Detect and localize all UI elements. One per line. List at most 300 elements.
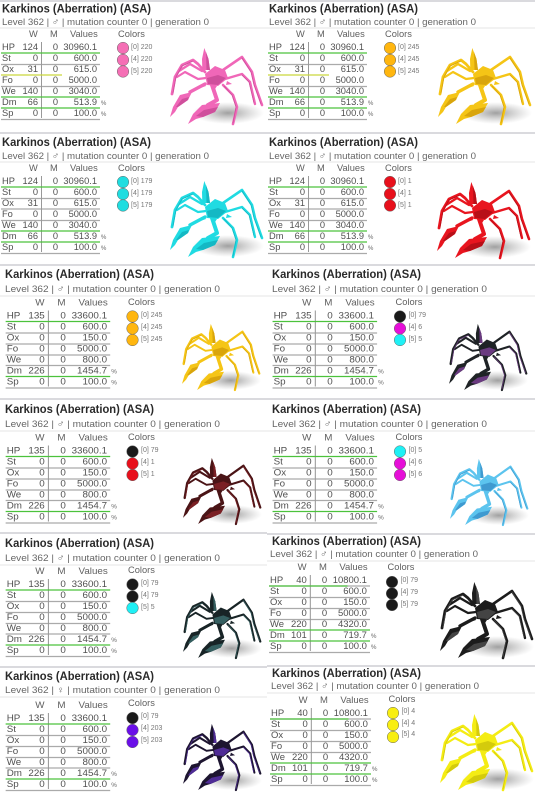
stats table: 0 [320, 53, 325, 63]
stats table: 0 [60, 601, 66, 612]
panel: sky blue karkinos [267, 399, 535, 525]
stats table: 0 [320, 64, 325, 74]
stats table [6, 700, 117, 790]
stats table: Ox [271, 729, 283, 740]
stats table: We [7, 757, 21, 768]
stats table: Dm [269, 231, 284, 241]
stats table: 0 [327, 479, 333, 489]
stats table: 140 [22, 86, 38, 96]
stats table: Fo [271, 740, 282, 751]
stats table: We [7, 355, 21, 365]
stats table: 0 [53, 42, 58, 52]
stats table: M [320, 694, 328, 705]
stats table: 31 [295, 198, 305, 208]
stats table: 100.0 [343, 640, 367, 651]
stats table: M [50, 163, 58, 173]
stats table: 10800.1 [334, 707, 368, 718]
subtitle: Level 362 | ♂ | mutation counter 0 | generation 0 [5, 284, 220, 295]
stats table: 0 [322, 640, 327, 651]
stats table: 0 [60, 311, 66, 321]
stats table: Sp [270, 640, 282, 651]
stats table: 0 [300, 53, 305, 63]
stats table: 33600.1 [72, 446, 107, 456]
stats table: W [35, 700, 44, 711]
stats table: 0 [322, 585, 327, 596]
color swatches: [0] 79 [141, 713, 159, 720]
stats table: 0 [53, 187, 58, 197]
stats table: 0 [53, 176, 58, 186]
stats table: Fo [7, 746, 18, 757]
stats table: 0 [327, 355, 333, 365]
icon: dark purple crab [183, 724, 262, 790]
stats table: 0 [301, 596, 307, 607]
stats table: St [7, 457, 16, 467]
stats table: 0 [60, 366, 66, 376]
stats table: 150.0 [82, 468, 107, 478]
stats table: 0 [322, 618, 327, 629]
stats table: 1454.7 [77, 366, 107, 376]
stats table: % [111, 771, 117, 778]
stats table: 0 [60, 501, 66, 511]
stats table: M [57, 700, 66, 711]
stats table: 0 [302, 718, 308, 729]
stats table: Sp [269, 108, 280, 118]
stats table: 600.0 [349, 322, 374, 332]
stats table: 1454.7 [77, 634, 107, 645]
stats table: 719.7 [343, 629, 367, 640]
stats table: 0 [323, 718, 328, 729]
stats table: Values [79, 566, 108, 577]
stats table: 135 [28, 579, 45, 590]
stats table: HP [7, 579, 20, 590]
color swatches: [5] 245 [398, 68, 420, 75]
color swatches: [5] 1 [141, 471, 155, 478]
stats table: 0 [53, 209, 58, 219]
stats table: 0 [327, 446, 333, 456]
stats table: 5000.0 [344, 344, 374, 354]
stats table: % [368, 112, 374, 118]
stats table: 0 [323, 740, 328, 751]
stats table: 31 [28, 198, 38, 208]
subtitle: Level 362 | ♂ | mutation counter 0 | generation 0 [271, 681, 479, 692]
stats table: St [274, 457, 283, 467]
stats table: 0 [302, 773, 308, 784]
stats table: W [299, 694, 308, 705]
color swatches: Colors [385, 29, 412, 39]
stats table: % [111, 782, 117, 789]
color swatches: [0] 5 [408, 447, 422, 454]
stats table: 30960.1 [63, 176, 97, 186]
stats table: 600.0 [82, 724, 107, 735]
stats table: 0 [306, 355, 312, 365]
stats table: Dm [7, 768, 22, 779]
stats table: 0 [53, 64, 58, 74]
stats table: 150.0 [82, 601, 107, 612]
stats table: 0 [60, 333, 66, 343]
title: Karkinos (Aberration) (ASA) [269, 2, 418, 16]
stats table: 1454.7 [344, 501, 374, 511]
stats table: Values [337, 163, 365, 173]
stats table: Fo [269, 75, 280, 85]
stats table: 150.0 [343, 596, 367, 607]
stats table: 150.0 [82, 333, 107, 343]
stats table: 220 [292, 751, 308, 762]
stats table: 0 [306, 377, 312, 387]
stats table: 100.0 [82, 512, 107, 522]
stats table: 0 [60, 623, 66, 634]
color swatches: [4] 6 [408, 459, 422, 466]
stats table: We [7, 623, 21, 634]
stats table: 33600.1 [72, 311, 107, 321]
stats table: 0 [320, 198, 325, 208]
color swatches: [5] 6 [408, 471, 422, 478]
stats table: 124 [289, 42, 305, 52]
stats table [6, 433, 117, 523]
stats table: 0 [306, 322, 312, 332]
stats table: 66 [295, 97, 305, 107]
stats table: Fo [7, 612, 18, 623]
stats table: 0 [60, 634, 66, 645]
title: Karkinos (Aberration) (ASA) [2, 2, 151, 16]
stats table: W [302, 298, 311, 308]
stats table: 0 [301, 640, 307, 651]
stats table: 135 [295, 311, 312, 321]
stats table: 124 [22, 176, 38, 186]
stats table: 0 [60, 779, 66, 790]
stats table: Fo [2, 75, 13, 85]
stats table: Values [70, 29, 98, 39]
stats table: 3040.0 [69, 86, 97, 96]
subtitle: Level 362 | ♂ | mutation counter 0 | generation 0 [2, 17, 209, 28]
stats table: % [111, 637, 117, 644]
stats table [273, 298, 384, 388]
stats table: 600.0 [349, 457, 374, 467]
color swatches: Colors [385, 163, 412, 173]
icon: dark teal crab [183, 592, 262, 658]
stats table: % [101, 235, 107, 241]
stats table: 226 [28, 366, 45, 376]
stats table: % [378, 380, 384, 386]
stats table: 0 [306, 468, 312, 478]
stats table: Fo [7, 479, 18, 489]
stats table: % [372, 778, 378, 784]
stats table: 615.0 [74, 64, 97, 74]
stats table: 0 [322, 574, 327, 585]
stats table: M [317, 163, 325, 173]
color swatches: [0] 79 [400, 577, 418, 584]
icon: pink crab [170, 48, 264, 124]
stats table: 0 [60, 479, 66, 489]
icon: gold crab [182, 324, 261, 390]
stats table: Ox [269, 198, 281, 208]
stats table: 0 [53, 97, 58, 107]
color swatches: [5] 79 [400, 601, 418, 608]
color swatches: [0] 179 [131, 178, 153, 185]
title: Karkinos (Aberration) (ASA) [272, 666, 421, 680]
stats table: % [111, 648, 117, 655]
stats table: St [7, 590, 16, 601]
stats table: 0 [60, 355, 66, 365]
stats table: 0 [320, 42, 325, 52]
subtitle: Level 362 | ♂ | mutation counter 0 | generation 0 [269, 151, 476, 162]
stats table: 124 [289, 176, 305, 186]
stats table: 1454.7 [344, 366, 374, 376]
stats table: St [7, 724, 16, 735]
stats table: Dm [7, 634, 22, 645]
color swatches: [0] 79 [141, 580, 159, 587]
stats table: Fo [7, 344, 18, 354]
stats table [6, 566, 117, 656]
color swatches: [4] 1 [141, 459, 155, 466]
stats table: 0 [320, 242, 325, 252]
color swatches [127, 297, 163, 346]
stats table: 800.0 [82, 623, 107, 634]
stats table: 33600.1 [72, 713, 107, 724]
stats table: M [57, 298, 66, 308]
stats table: St [270, 585, 279, 596]
color swatches [127, 432, 159, 481]
stats table: HP [2, 42, 15, 52]
icon: dark red crab [183, 458, 262, 524]
stats table: 0 [33, 242, 38, 252]
stats table: 0 [320, 97, 325, 107]
stats table: 600.0 [343, 585, 367, 596]
title: Karkinos (Aberration) (ASA) [272, 534, 421, 548]
stats table: 5000.0 [77, 479, 107, 489]
stats table: % [368, 235, 374, 241]
panel: cyan karkinos [0, 133, 267, 257]
stats table: Ox [274, 468, 286, 478]
stats table: 0 [60, 446, 66, 456]
title: Karkinos (Aberration) (ASA) [2, 135, 151, 149]
stats table: Sp [274, 377, 286, 387]
stats table: 40 [296, 574, 307, 585]
stats table [268, 163, 374, 254]
stats table: Dm [270, 629, 285, 640]
stats table: W [296, 29, 305, 39]
stats table: 0 [39, 333, 45, 343]
subtitle: Level 362 | ♂ | mutation counter 0 | generation 0 [2, 151, 209, 162]
stats table: Sp [271, 773, 283, 784]
stats table: Values [79, 433, 108, 443]
stats table: Ox [7, 333, 19, 343]
stats table: 0 [53, 220, 58, 230]
stats table: M [324, 433, 333, 443]
stats table: Ox [274, 333, 286, 343]
stats table: 0 [39, 645, 45, 656]
stats table: 0 [306, 333, 312, 343]
stats table: 600.0 [341, 187, 364, 197]
stats table: 615.0 [74, 198, 97, 208]
color swatches [384, 163, 412, 211]
color swatches: [4] 220 [131, 56, 153, 63]
stats table: 0 [327, 501, 333, 511]
stats table: 150.0 [349, 333, 374, 343]
color swatches [387, 694, 416, 743]
stats table: % [371, 645, 377, 651]
stats table: Ox [7, 735, 19, 746]
stats table: 226 [28, 501, 45, 511]
stats table: Values [345, 298, 375, 308]
stats table: Sp [7, 512, 19, 522]
stats table: Ox [7, 601, 19, 612]
stats table: % [101, 101, 107, 107]
stats table: 0 [39, 590, 45, 601]
stats table: % [111, 504, 117, 510]
stats table: 100.0 [82, 779, 107, 790]
stats table: 0 [323, 773, 328, 784]
stats table: We [2, 86, 16, 96]
stats table: Sp [2, 242, 13, 252]
color swatches: Colors [128, 698, 155, 708]
icon: dark magenta crab [449, 324, 528, 390]
stats table: 226 [28, 634, 45, 645]
stats table: 226 [28, 768, 45, 779]
color swatches [117, 163, 153, 211]
panel: gold karkinos level 135 HP [0, 265, 267, 390]
stats table: % [368, 101, 374, 107]
stats table: % [378, 515, 384, 521]
stats table: St [269, 187, 278, 197]
stats table: 3040.0 [336, 220, 364, 230]
stats table: 0 [39, 735, 45, 746]
stats table: 0 [39, 457, 45, 467]
stats table: 0 [300, 108, 305, 118]
icon: red crab [437, 182, 531, 258]
stats table: 0 [323, 729, 328, 740]
stats table: 800.0 [82, 490, 107, 500]
stats table: 0 [306, 490, 312, 500]
color swatches: [0] 79 [141, 447, 159, 454]
subtitle: Level 362 | ♀ | mutation counter 0 | generation 0 [5, 685, 220, 696]
stats table: We [270, 618, 284, 629]
stats table: We [7, 490, 21, 500]
stats table: 0 [327, 344, 333, 354]
stats table: W [298, 561, 307, 572]
stats table: 1454.7 [77, 768, 107, 779]
title: Karkinos (Aberration) (ASA) [272, 402, 421, 416]
stats table: 0 [60, 645, 66, 656]
stats table: 140 [22, 220, 38, 230]
stats table: 100.0 [341, 108, 364, 118]
stats table: 5000.0 [336, 209, 364, 219]
stats table: 0 [39, 322, 45, 332]
stats table: 0 [60, 735, 66, 746]
icon: yellow crab [440, 714, 534, 790]
stats table: Dm [274, 501, 289, 511]
stats table: 0 [60, 612, 66, 623]
stats table: HP [271, 707, 284, 718]
color swatches: Colors [118, 163, 145, 173]
color swatches: [5] 4 [402, 731, 415, 738]
stats table [270, 694, 378, 786]
stats table: M [319, 561, 327, 572]
stats table: 800.0 [82, 757, 107, 768]
stats table: Values [70, 163, 98, 173]
stats table: 0 [327, 468, 333, 478]
stats table: 0 [39, 490, 45, 500]
stats table: 0 [60, 322, 66, 332]
stats table: 0 [306, 479, 312, 489]
stats table: W [302, 433, 311, 443]
color swatches: [4] 4 [402, 720, 415, 727]
title: Karkinos (Aberration) (ASA) [5, 267, 154, 281]
color swatches: [5] 5 [408, 336, 422, 343]
stats table: 100.0 [349, 512, 374, 522]
stats table: 100.0 [82, 377, 107, 387]
color swatches: [5] 5 [141, 604, 155, 611]
stats table: 0 [60, 590, 66, 601]
stats table: 0 [33, 53, 38, 63]
color swatches: [4] 79 [141, 592, 159, 599]
stats table: 0 [60, 579, 66, 590]
color swatches: [4] 245 [141, 324, 163, 331]
stats table: Values [79, 298, 108, 308]
stats table: St [2, 53, 11, 63]
stats table: Dm [274, 366, 289, 376]
stats table: Sp [7, 779, 19, 790]
color swatches: Colors [388, 562, 415, 572]
stats table: 0 [39, 612, 45, 623]
stats table: 40 [297, 707, 308, 718]
stats table: 0 [320, 209, 325, 219]
color swatches [384, 29, 420, 77]
stats table: % [101, 112, 107, 118]
color swatches: Colors [128, 565, 155, 575]
stats table: St [274, 322, 283, 332]
stats table: 30960.1 [63, 42, 97, 52]
stats table: 0 [53, 86, 58, 96]
stats table: Sp [7, 645, 19, 656]
stats table: 513.9 [74, 97, 97, 107]
stats table: Values [337, 29, 365, 39]
stats table: 30960.1 [330, 42, 364, 52]
stats table: St [2, 187, 11, 197]
stats table: Fo [270, 607, 281, 618]
stats table: 220 [291, 618, 307, 629]
color swatches: Colors [388, 694, 416, 704]
stats table: 0 [60, 512, 66, 522]
title: Karkinos (Aberration) (ASA) [5, 402, 154, 416]
stats table: 0 [53, 231, 58, 241]
stats table: 0 [323, 762, 328, 773]
stats table [273, 433, 384, 523]
stats table: 0 [39, 355, 45, 365]
stats table: 3040.0 [336, 86, 364, 96]
stats table: Dm [7, 366, 22, 376]
stats table: 33600.1 [338, 446, 374, 456]
stats table: 513.9 [341, 231, 364, 241]
stats table: 31 [295, 64, 305, 74]
stats table: 0 [327, 512, 333, 522]
stats table: 615.0 [341, 198, 364, 208]
stats table: % [368, 246, 374, 252]
color swatches: [5] 203 [141, 737, 163, 744]
stats table: 31 [28, 64, 38, 74]
color swatches: [4] 79 [400, 589, 418, 596]
subtitle: Level 362 | ♂ | mutation counter 0 | generation 0 [270, 549, 478, 560]
stats table: 719.7 [344, 762, 368, 773]
stats table: HP [274, 446, 287, 456]
stats table [269, 561, 377, 652]
stats table: % [111, 369, 117, 375]
stats table: 0 [327, 377, 333, 387]
stats table: 140 [289, 86, 305, 96]
stats table: We [274, 355, 288, 365]
color swatches [386, 562, 418, 611]
stats table: 5000.0 [344, 479, 374, 489]
stats table: 0 [320, 108, 325, 118]
